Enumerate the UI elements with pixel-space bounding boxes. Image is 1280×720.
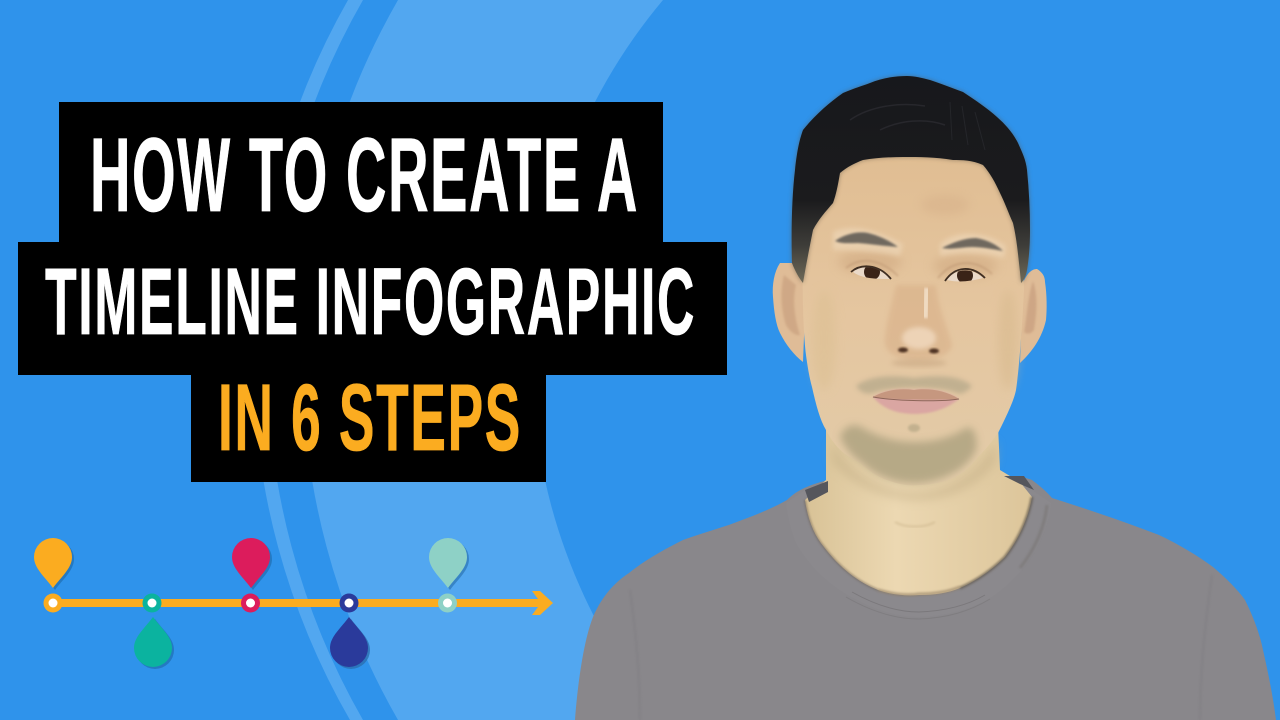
nose	[885, 285, 952, 367]
right eye	[938, 263, 992, 284]
presenter portrait	[575, 76, 1276, 720]
right ear	[1020, 269, 1047, 363]
title block	[18, 102, 727, 482]
title line 3: IN 6 STEPS	[218, 365, 522, 471]
title background panels	[18, 102, 727, 482]
title line 2: TIMELINE INFOGRAPHIC	[45, 249, 696, 355]
title line 1: HOW TO CREATE A	[90, 117, 639, 234]
hair	[792, 76, 1030, 283]
left ear	[773, 263, 806, 362]
forehead and cheek shading	[812, 195, 1018, 390]
background arc: thin band	[253, 0, 363, 720]
stubble	[840, 376, 977, 483]
neck	[805, 425, 1032, 595]
t-shirt collar	[786, 490, 1051, 619]
milestone 5: mint pin	[429, 538, 469, 612]
milestone 4: navy pin	[330, 594, 370, 669]
milestone 1: amber pin	[34, 538, 74, 612]
left eyebrow	[833, 228, 903, 256]
background arc: wide band	[302, 0, 663, 720]
timeline graphic	[34, 538, 553, 669]
t-shirt	[575, 477, 1276, 720]
timeline line with arrow	[53, 591, 553, 615]
shirt shadow behind neck	[805, 476, 1034, 502]
mouth	[873, 389, 959, 414]
milestone 2: teal pin	[134, 594, 174, 669]
milestone 3: crimson pin	[232, 538, 272, 612]
right eyebrow	[940, 234, 1006, 258]
left eye	[846, 261, 898, 280]
face	[803, 150, 1024, 485]
